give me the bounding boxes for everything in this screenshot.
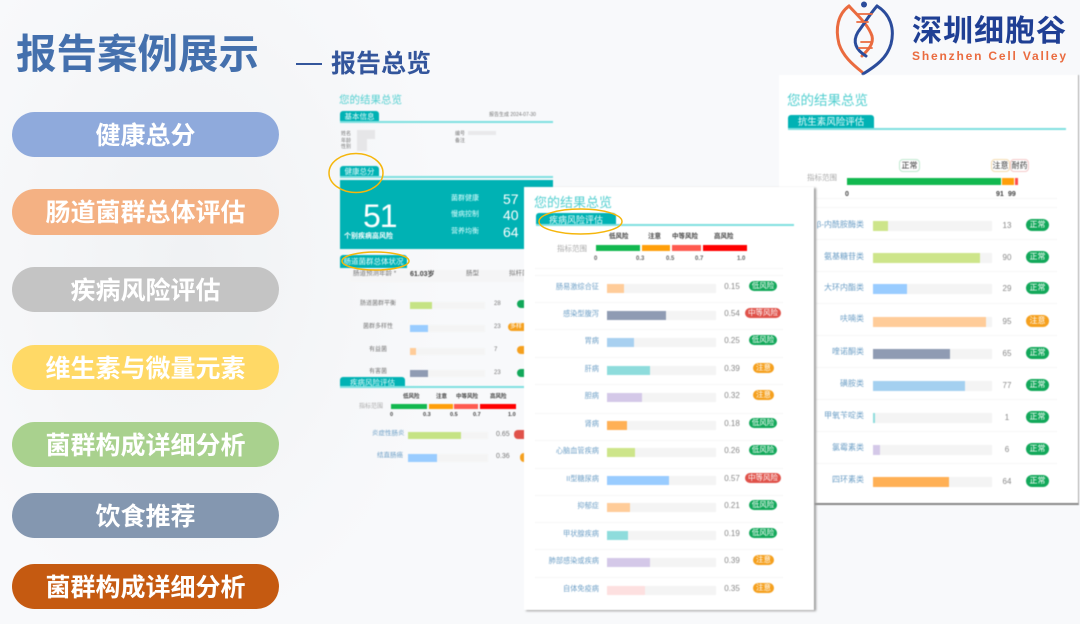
- risk scale: 注意: [436, 394, 447, 400]
- risk scale: 中等风险: [456, 394, 478, 400]
- row: liver: [584, 362, 775, 376]
- section: gut flora overview: 肠道预测年龄 *: [353, 270, 396, 277]
- row: furan: 95: [1003, 317, 1011, 326]
- section: basic info: 编号备注: [455, 131, 465, 144]
- risk scale: 0.5: [450, 412, 458, 418]
- risk scale: 1.0: [737, 256, 745, 262]
- category pill: flora composition: [12, 422, 279, 467]
- flora rows: 23: [494, 324, 501, 330]
- antibiotic scale: 0: [845, 191, 849, 198]
- row: furan: [840, 314, 1050, 328]
- row: tetracycline: 正常: [1030, 476, 1046, 485]
- row: depression: 抑郁症: [577, 501, 599, 510]
- row: infectious diarrhea: 0.54: [724, 309, 740, 318]
- section: disease risk preview: [339, 376, 525, 463]
- flora rows: 有害菌: [369, 369, 387, 375]
- row: macrolide: [824, 281, 1050, 295]
- antibiotic scale: 91: [996, 191, 1004, 198]
- row: thyroid: [563, 527, 778, 541]
- disease rows: [372, 429, 525, 463]
- row: chloramphenicol: 6: [1005, 445, 1009, 454]
- row: furan: 注意: [1030, 316, 1046, 325]
- row: furan: 呋喃类: [840, 314, 864, 323]
- risk scale: 0.3: [636, 256, 644, 262]
- risk scale: 低风险: [609, 233, 628, 240]
- category pill: vitamins and minerals: [12, 345, 279, 390]
- row: cardiovascular: 低风险: [752, 445, 774, 454]
- row: autoimmune: 注意: [756, 583, 771, 592]
- row: kidney: 低风险: [752, 418, 774, 427]
- section: health score: 健康总分: [344, 167, 374, 176]
- row: infectious diarrhea: [562, 307, 782, 321]
- row: aminoglycoside: 正常: [1030, 252, 1046, 261]
- callout ellipses: [328, 152, 623, 271]
- row: cardiovascular: 心脑血管疾病: [556, 446, 599, 455]
- row: trimethoprim: [824, 410, 1050, 424]
- category pill: health score: 健康总分: [95, 122, 196, 150]
- row: thyroid: 0.19: [724, 529, 740, 538]
- row: cardiovascular: 0.26: [724, 446, 740, 455]
- row: chloramphenicol: 氯霉素类: [832, 443, 864, 452]
- disease rows: 炎症性肠炎: [372, 430, 404, 437]
- section: gut flora overview: 61.03岁: [410, 271, 435, 278]
- row: infectious diarrhea: 中等风险: [748, 308, 778, 317]
- row: stomach: 低风险: [752, 335, 774, 344]
- row: beta-lactam: [816, 218, 1050, 232]
- row: thyroid: 低风险: [752, 528, 774, 537]
- row: gallbladder: [584, 389, 775, 402]
- row: IBS: 0.15: [724, 282, 740, 291]
- row: type 2 diabetes: 中等风险: [748, 473, 778, 482]
- row: trimethoprim: 甲氧苄啶类: [824, 411, 864, 420]
- row: stomach: 胃病: [585, 336, 599, 345]
- logo: 深圳细胞谷: [912, 15, 1066, 48]
- flora rows: 菌群多样性: [363, 324, 393, 330]
- row: depression: 低风险: [752, 500, 774, 509]
- logo: Shenzhen Cell Valley: [912, 49, 1066, 63]
- section: health score: [339, 165, 554, 250]
- section: basic info: 姓名年龄性别: [341, 131, 351, 150]
- section: gut flora overview: 拟杆菌: [509, 270, 528, 277]
- row: depression: [577, 499, 778, 513]
- category pill: health score: [12, 112, 279, 157]
- row: IBS: 低风险: [752, 281, 774, 290]
- row: sulfonamide: 磺胺类: [840, 379, 864, 388]
- panel: right antibiotic report: [779, 75, 1079, 505]
- score card: 40: [503, 207, 519, 223]
- risk scale: 高风险: [714, 233, 734, 240]
- antibiotic scale: 耐药: [1012, 161, 1028, 170]
- row: gallbladder: 注意: [756, 390, 771, 399]
- row: kidney: 肾病: [585, 419, 599, 428]
- antibiotic scale: 正常: [902, 161, 918, 170]
- row: tetracycline: 四环素类: [832, 475, 864, 484]
- section: gut flora overview: 肠型: [466, 270, 479, 277]
- row: beta-lactam: β-内酰胺酶类: [817, 220, 864, 229]
- row: lung infection: 肺部感染或疾病: [549, 556, 599, 565]
- disease rows: 0.65: [496, 431, 510, 438]
- score card: 慢病控制: [451, 211, 479, 218]
- report heading: 您的结果总览: [339, 94, 402, 106]
- risk scale: 指标范围: [359, 404, 383, 410]
- flora rows: [360, 299, 525, 378]
- score card: 菌群健康: [451, 195, 479, 202]
- row: beta-lactam: 正常: [1030, 220, 1046, 229]
- section tab: antibiotic risk: 抗生素风险评估: [798, 117, 864, 128]
- category pill: diet recommendation: [12, 493, 279, 538]
- row: lung infection: [548, 554, 775, 568]
- score card: 营养均衡: [451, 228, 479, 235]
- row: sulfonamide: 77: [1003, 381, 1011, 390]
- row: quinolone: 喹诺酮类: [832, 347, 864, 356]
- row: lung infection: 0.39: [724, 556, 740, 565]
- row: depression: 0.21: [724, 501, 740, 510]
- row: quinolone: 65: [1003, 349, 1011, 358]
- category pill: diet recommendation: 饮食推荐: [95, 503, 196, 531]
- logo: [836, 2, 1066, 76]
- risk scale: 0.3: [423, 412, 431, 418]
- risk scale: 1.0: [508, 412, 516, 418]
- row: type 2 diabetes: II型糖尿病: [566, 474, 599, 483]
- score card: 57: [503, 191, 519, 207]
- section: gut flora overview: 肠道菌群总体状况: [344, 257, 404, 266]
- row: autoimmune: 0.35: [724, 584, 740, 593]
- category pill: flora composition 2: 菌群构成详细分析: [45, 574, 246, 602]
- title: 报告案例展示: [16, 31, 259, 77]
- row: type 2 diabetes: 0.57: [724, 474, 740, 483]
- section tab: disease risk: 疾病风险评估: [549, 215, 603, 225]
- row: lung infection: 注意: [756, 555, 771, 564]
- category pill: gut flora overall: 肠道菌群总体评估: [45, 199, 246, 227]
- row: stomach: 0.25: [724, 336, 740, 345]
- row: aminoglycoside: 90: [1003, 253, 1011, 262]
- section: basic info: 基本信息: [344, 112, 374, 121]
- row: macrolide: 大环内酯类: [824, 283, 864, 292]
- report heading: 您的结果总览: [787, 93, 868, 108]
- row: type 2 diabetes: [566, 472, 782, 486]
- flora rows: 28: [494, 301, 501, 307]
- risk scale: 注意: [648, 233, 661, 240]
- row: aminoglycoside: [824, 250, 1050, 264]
- row: trimethoprim: 正常: [1030, 412, 1046, 421]
- row: macrolide: 29: [1003, 284, 1011, 293]
- flora rows: 多样: [510, 324, 522, 330]
- row: chloramphenicol: [832, 442, 1050, 456]
- row: sulfonamide: [840, 378, 1050, 392]
- risk scale: 低风险: [403, 394, 420, 400]
- risk scale: 0.7: [473, 412, 481, 418]
- risk scale: 高风险: [490, 394, 507, 400]
- section: disease risk preview: 疾病风险评估: [350, 378, 395, 387]
- row: liver: 注意: [756, 363, 771, 372]
- subtitle: report overview: 报告总览: [331, 50, 431, 78]
- section: basic info: [339, 110, 554, 151]
- score card: [340, 180, 553, 249]
- row: macrolide: 正常: [1030, 283, 1046, 292]
- row: liver: 0.39: [724, 364, 740, 373]
- row: cardiovascular: [556, 444, 778, 458]
- risk scale: 中等风险: [672, 233, 698, 240]
- risk scale: 0.7: [695, 256, 703, 262]
- category pill: flora composition: 菌群构成详细分析: [45, 432, 246, 460]
- row: infectious diarrhea: 感染型腹泻: [563, 309, 599, 318]
- flora rows: 7: [494, 347, 497, 353]
- category pill: gut flora overall: [12, 189, 279, 235]
- row: aminoglycoside: 氨基糖苷类: [824, 252, 864, 261]
- row: trimethoprim: 1: [1005, 413, 1009, 422]
- row: stomach: [584, 334, 778, 348]
- row: beta-lactam: 13: [1003, 221, 1011, 230]
- row: chloramphenicol: 正常: [1030, 444, 1046, 453]
- row: sulfonamide: 正常: [1030, 380, 1046, 389]
- risk scale: 0: [594, 256, 597, 262]
- category pill: disease risk: [12, 267, 279, 312]
- row: kidney: [584, 417, 778, 431]
- category pill: flora composition 2: [12, 564, 279, 609]
- row: autoimmune: [563, 582, 775, 596]
- row: IBS: 肠易激综合征: [556, 282, 599, 291]
- category pill: disease risk: 疾病风险评估: [70, 277, 220, 305]
- section: basic info: 报告生成 2024-07-30: [489, 112, 536, 118]
- row: IBS: [556, 280, 778, 294]
- risk scale: [557, 232, 748, 262]
- row: quinolone: 正常: [1030, 348, 1046, 357]
- flora rows: 有益菌: [369, 347, 387, 353]
- flora rows: 肠道菌群平衡: [360, 301, 396, 307]
- score card: 64: [503, 224, 519, 240]
- row: thyroid: 甲状腺疾病: [563, 529, 599, 538]
- antibiotic scale: 指标范围: [807, 173, 837, 182]
- disease rows: 0.36: [496, 453, 510, 460]
- row: autoimmune: 自体免疫病: [563, 584, 599, 593]
- risk scale: 0: [390, 412, 393, 418]
- row: kidney: 0.18: [724, 419, 740, 428]
- risk scale: [359, 392, 517, 418]
- score card: 个别疾病高风险: [344, 233, 393, 240]
- report heading: 您的结果总览: [534, 195, 612, 210]
- risk scale: 0.5: [666, 256, 674, 262]
- disease rows: 结直肠癌: [377, 452, 403, 459]
- score card: 51: [363, 198, 397, 234]
- section: gut flora overview: [339, 254, 528, 378]
- category pill: vitamins and minerals: 维生素与微量元素: [45, 355, 246, 383]
- risk scale: 指标范围: [557, 244, 587, 253]
- row: liver: 肝病: [585, 364, 599, 373]
- antibiotic scale: 99: [1008, 191, 1016, 198]
- flora rows: 23: [494, 370, 501, 376]
- row: tetracycline: [832, 474, 1050, 488]
- row: quinolone: [832, 346, 1050, 360]
- row: tetracycline: 64: [1003, 477, 1011, 486]
- row: gallbladder: 0.32: [724, 391, 740, 400]
- panel: center disease risk report: [524, 187, 814, 610]
- panel: left report page: [339, 94, 554, 463]
- row: gallbladder: 胆病: [585, 391, 599, 400]
- antibiotic scale: 注意: [992, 161, 1008, 170]
- antibiotic scale: [807, 158, 1030, 198]
